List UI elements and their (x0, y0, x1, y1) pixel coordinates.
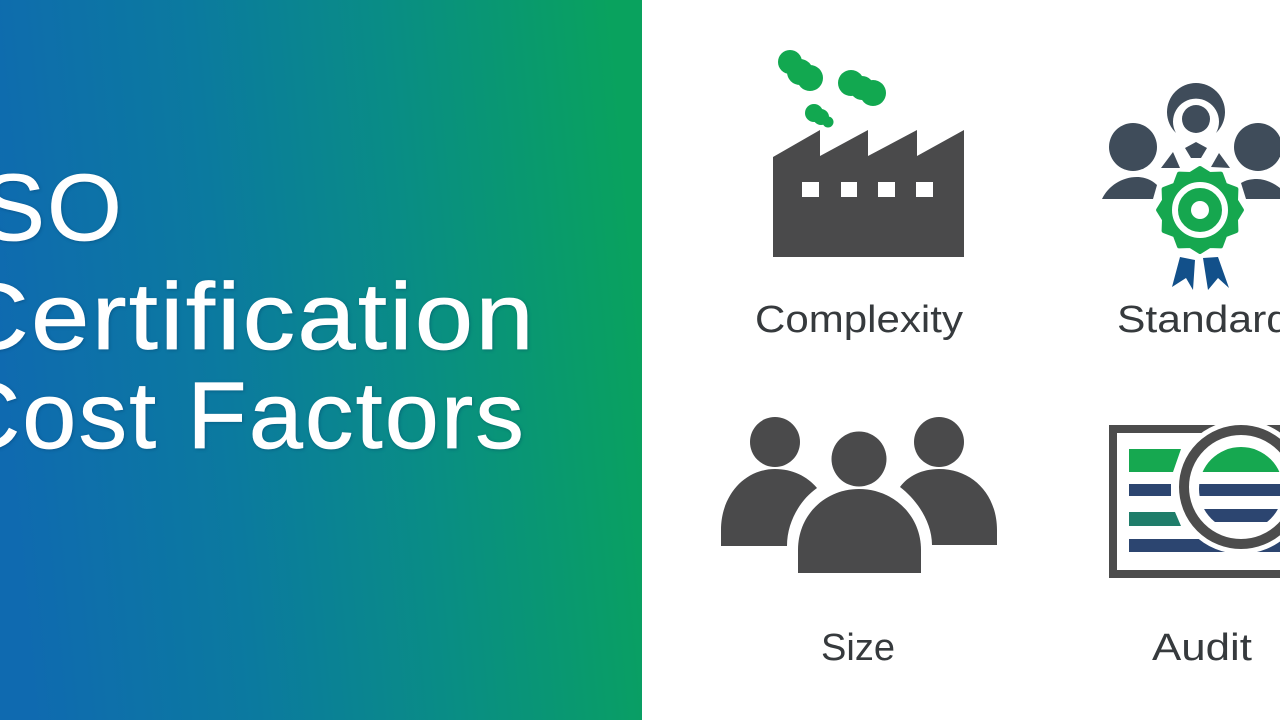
title (0, 155, 536, 469)
label: Complexity: Complexity (755, 299, 963, 341)
ribbons (1172, 257, 1229, 290)
smoke clouds (778, 50, 886, 128)
panel: gradient background (0, 0, 642, 720)
icon: audit document with magnifier (1113, 420, 1280, 574)
document bars (1129, 449, 1280, 552)
label: Standard: Standard (1117, 299, 1280, 341)
label: Size: Size (821, 627, 895, 669)
label: Audit: Audit (1152, 627, 1252, 669)
icon: group of people (721, 417, 997, 573)
icon: people with certification badge (1102, 83, 1280, 290)
document frame (1113, 429, 1280, 574)
people (1102, 83, 1280, 199)
magnifier lens (1174, 420, 1280, 554)
factory building (773, 130, 964, 257)
badge (1158, 168, 1242, 252)
factory windows (802, 182, 933, 197)
icon: factory with smoke (773, 50, 964, 257)
